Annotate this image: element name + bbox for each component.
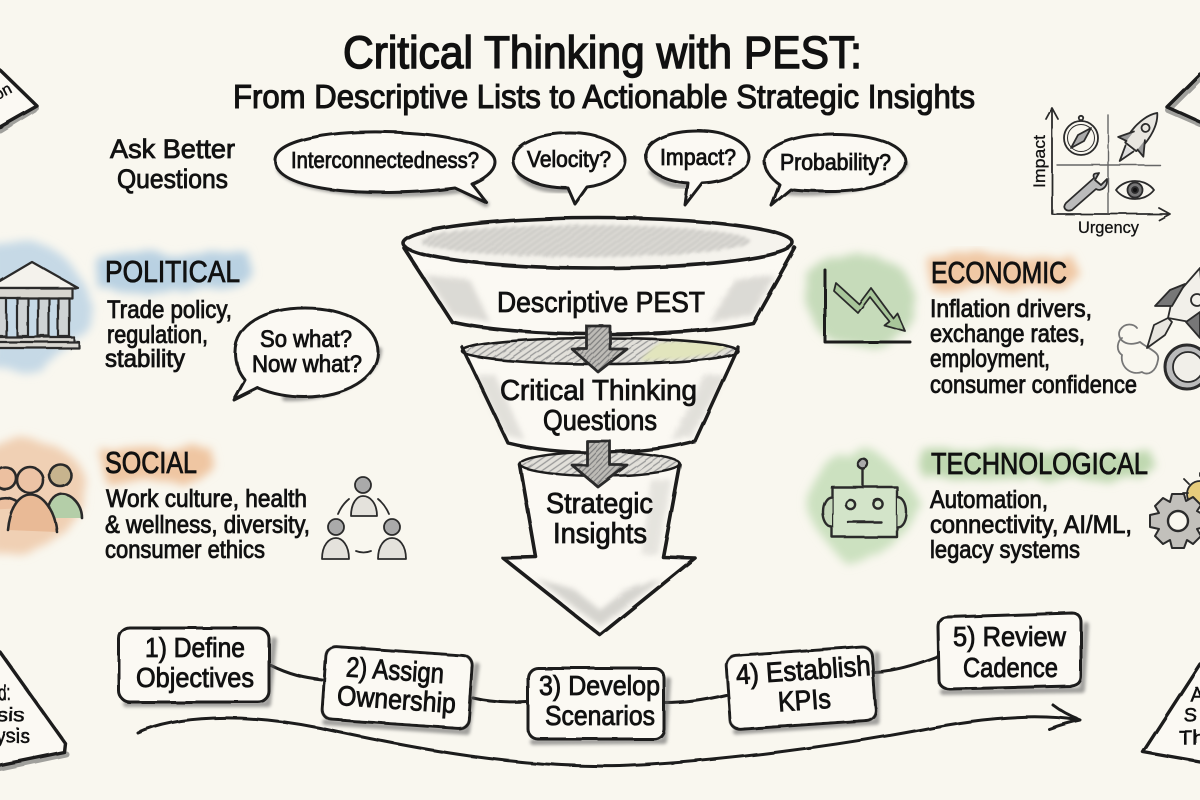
text: political factors: stability	[105, 345, 185, 373]
speech bubble: Probability	[765, 134, 906, 205]
text: technological factors: Automation,	[930, 486, 1048, 514]
speech bubble: so what	[234, 308, 379, 400]
panel: technological	[808, 443, 1200, 567]
speech bubble: Interconnectedness	[275, 132, 495, 204]
watercolor wash	[808, 443, 1156, 567]
heading: ask better questions: Questions	[117, 164, 228, 194]
panel: economic	[808, 253, 1200, 399]
speech bubble: Interconnectedness: Interconnectedness?	[291, 147, 479, 173]
title: Critical Thinking with PEST:	[343, 27, 862, 78]
text: technological factors: legacy systems	[930, 536, 1080, 564]
speech bubble: Impact	[646, 131, 749, 205]
icon: eye	[1116, 181, 1154, 199]
funnel label: strategic insights: Insights	[553, 518, 647, 550]
icon: temple	[0, 262, 79, 348]
corner card: bottom right: S	[1184, 705, 1197, 727]
process step 1: Objectives	[136, 662, 254, 693]
icon: small rocket	[1107, 103, 1170, 171]
watercolor wash	[0, 241, 256, 372]
process step 5	[938, 613, 1086, 692]
text: economic factors: employment,	[930, 345, 1050, 373]
heading: economic: ECONOMIC	[931, 255, 1067, 290]
matrix axes	[1046, 108, 1170, 220]
funnel tier 3: strategic insights	[503, 452, 695, 635]
speech bubble: so what: Now what?	[252, 351, 362, 378]
text: political factors	[105, 296, 232, 373]
process step 4	[726, 646, 882, 732]
text: technological factors: connectivity, AI/ML,	[930, 511, 1132, 539]
process step 2: 2) Assign	[345, 651, 445, 689]
subtitle: From Descriptive Lists to Actionable Strategic Insights	[233, 78, 975, 115]
heading: social: SOCIAL	[105, 445, 197, 480]
process step 1	[119, 628, 274, 704]
funnel label: strategic insights	[546, 488, 653, 550]
long timeline arrow	[138, 705, 1080, 766]
panel: political	[0, 241, 256, 373]
icon: three people	[0, 464, 82, 532]
text: social factors: Work culture, health	[106, 485, 307, 513]
process step 3: Scenarios	[545, 700, 655, 731]
heading: technological: TECHNOLOGICAL	[931, 446, 1148, 481]
funnel label: strategic insights: Strategic	[546, 488, 653, 520]
heading: ask better questions: Ask Better	[110, 134, 235, 164]
heading: political: POLITICAL	[105, 254, 240, 289]
text: economic factors: Inflation drivers,	[930, 295, 1092, 323]
text: political factors: Trade policy,	[107, 296, 232, 324]
icon: compass	[1064, 116, 1098, 155]
funnel tier 1: descriptive pest	[403, 218, 795, 334]
arrow: descriptive to critical	[572, 326, 627, 372]
process step 1: 1) Define	[145, 632, 245, 663]
label: impact axis: Impact	[1030, 135, 1049, 188]
process step 4: KPIs	[777, 683, 832, 718]
funnel label: critical thinking questions: Critical Thinking	[500, 375, 697, 407]
funnel tier 2: critical thinking questions	[462, 337, 738, 453]
icon: falling chart	[825, 270, 910, 342]
speech bubble: so what: So what?	[260, 326, 352, 353]
arrow: critical to strategic	[572, 441, 627, 487]
icon: team triangle	[322, 477, 406, 559]
icon: robot	[823, 459, 906, 537]
icon: launching rocket	[1118, 268, 1200, 389]
process step 5: Cadence	[963, 652, 1058, 683]
corner card: bottom right	[1143, 660, 1200, 764]
process step 2	[321, 646, 477, 732]
process connectors	[270, 657, 936, 703]
speech bubble: Probability: Probability?	[780, 149, 891, 175]
corner card: bottom left	[0, 648, 66, 768]
text: social factors: consumer ethics	[105, 536, 265, 564]
process step 3: 3) Develop	[539, 670, 660, 701]
funnel label: descriptive pest: Descriptive PEST	[497, 287, 705, 319]
icon: gear and bulb	[1150, 473, 1200, 548]
text: political factors: regulation,	[107, 321, 208, 349]
text: social factors: & wellness, diversity,	[105, 511, 310, 539]
text: economic factors: exchange rates,	[930, 320, 1085, 348]
panel: social	[0, 440, 406, 564]
process step 5: 5) Review	[953, 621, 1067, 652]
label: urgency axis: Urgency	[1078, 218, 1139, 237]
corner card: top left	[0, 68, 37, 130]
funnel label: critical thinking questions: Questions	[543, 405, 657, 437]
speech bubble: Impact: Impact?	[660, 144, 736, 170]
process step 3	[528, 668, 668, 742]
speech bubble: Velocity: Velocity?	[527, 146, 611, 172]
process step 2: Ownership	[336, 680, 457, 719]
corner card: top right	[1167, 74, 1200, 124]
text: social factors	[105, 485, 310, 564]
panel: priority matrix	[1030, 103, 1170, 237]
heading: ask better questions	[110, 134, 235, 194]
text: economic factors: consumer confidence	[930, 371, 1137, 399]
text: technological factors	[930, 486, 1132, 564]
speech bubble: Velocity	[513, 133, 625, 204]
funnel label: critical thinking questions	[500, 375, 697, 437]
funnel	[403, 218, 795, 635]
icon: wrench	[1064, 173, 1107, 211]
process step 4: 4) Establish	[735, 650, 872, 690]
text: economic factors	[930, 295, 1137, 399]
heading wash	[925, 256, 1078, 288]
watercolor wash	[0, 440, 216, 552]
watercolor wash	[808, 253, 915, 348]
